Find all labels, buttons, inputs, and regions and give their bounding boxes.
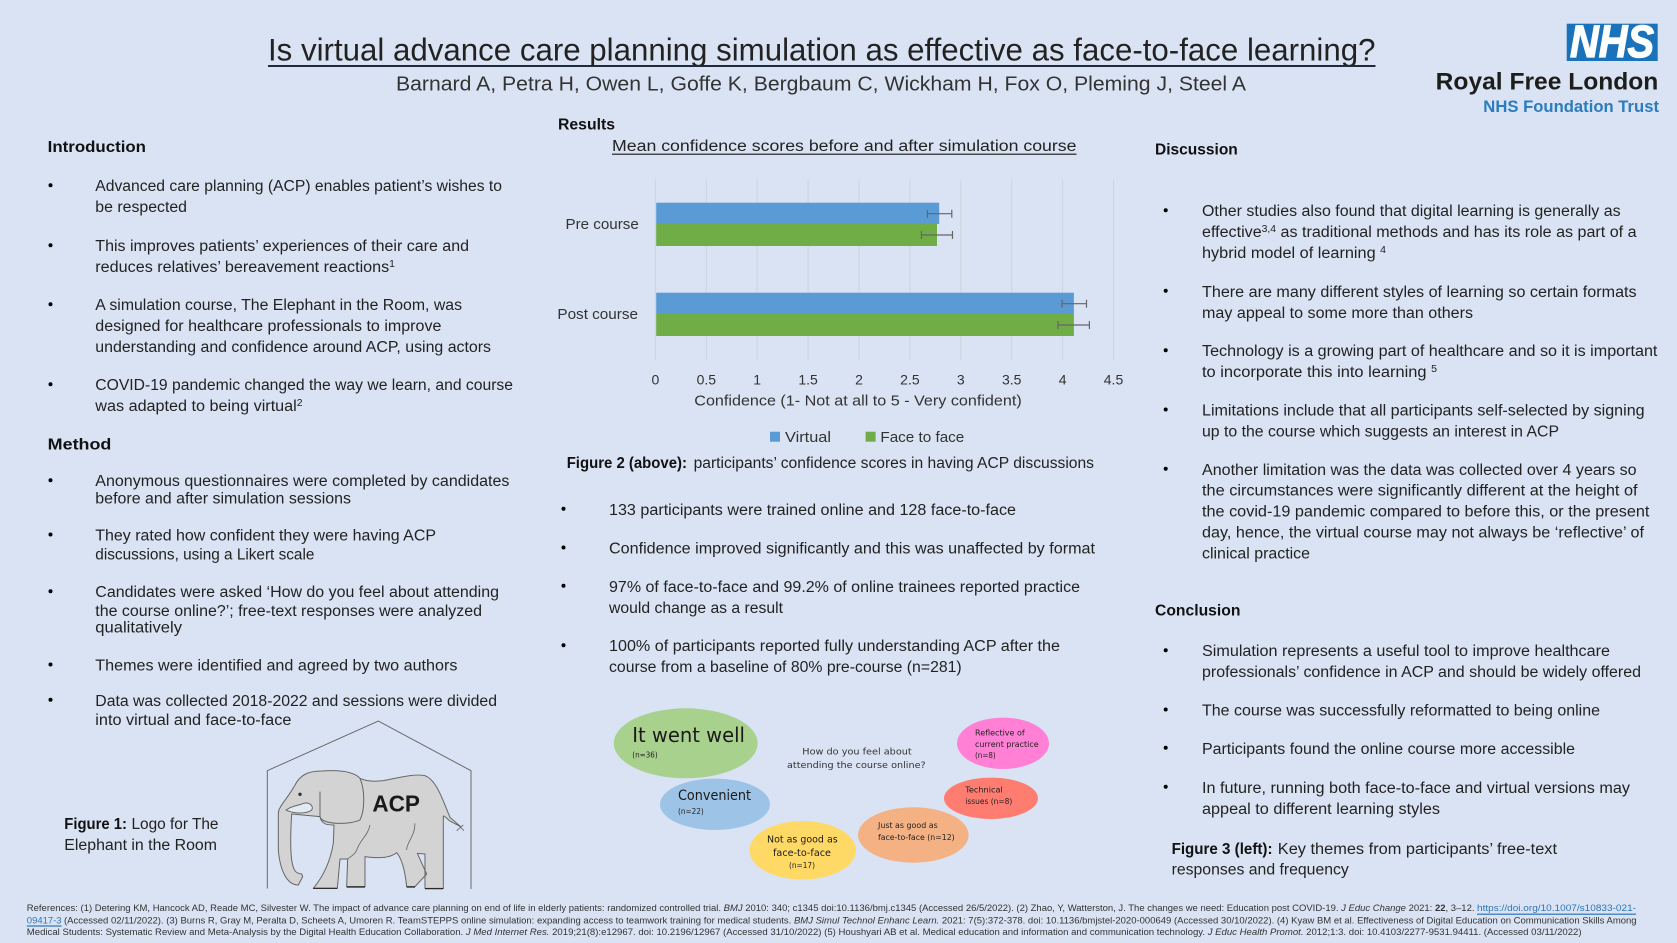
bullet: likert scale: They rated how confident they were having ACP [95, 528, 436, 544]
bullet: covid-19: COVID-19 pandemic changed the way we learn, and course [95, 377, 513, 394]
panel: introduction [48, 139, 513, 415]
figure 2 caption: participants’ confidence scores in having ACP discussions [694, 455, 1094, 472]
heading: method: Method [48, 436, 111, 454]
theme: not as good as face-to-face: (n=17) [789, 861, 815, 870]
logo: Royal Free London NHS: Royal Free London [1436, 68, 1658, 96]
bullet: advance care planning: be respected [95, 199, 187, 216]
bullet: advance care planning [48, 178, 502, 216]
bullet: questionnaires: before and after simulation sessions [95, 490, 351, 508]
bullet: another limitation: clinical practice [1202, 546, 1310, 562]
bullet: experiences of care: 1 [389, 259, 395, 270]
bullet: covid-19: was adapted to being virtual [95, 398, 288, 415]
bullet: another limitation: the covid-19 pandemic compared to before this, or the present [1202, 504, 1650, 520]
heading: conclusion: Conclusion [1155, 602, 1240, 620]
references: https://doi.org/10.1007/s10833-021- [1477, 903, 1636, 913]
bullet: questionnaires [48, 473, 510, 508]
theme: just as good as face-to-face [858, 807, 969, 863]
category labels: Post course [557, 306, 638, 323]
theme: convenient: Convenient [678, 788, 751, 804]
panel: results [557, 116, 1123, 676]
bullet: technology: Technology is a growing part of healthcare and so it is important [1202, 343, 1658, 360]
category labels [557, 216, 639, 323]
bullet: future [1164, 780, 1630, 818]
central question: attending the course online? [787, 761, 926, 771]
bullet: technology: to incorporate this into learning [1202, 364, 1414, 381]
bullet: simulation course: designed for healthcare professionals to improve [95, 318, 441, 335]
bullet: limitations: Limitations include that all participants self-selected by signing [1202, 402, 1645, 420]
bullet: covid-19: 2 [297, 398, 303, 409]
bullet: covid-19 [48, 377, 513, 415]
panel: method [48, 436, 510, 729]
theme: it went well [614, 708, 758, 778]
axis tick labels [652, 372, 1123, 388]
elephant body [278, 771, 461, 888]
bullet: other studies: effective [1202, 224, 1259, 241]
bullet: data collection: into virtual and face-to-face [95, 712, 291, 729]
bullet: technology: 5 [1431, 364, 1437, 375]
figure 1 caption: Elephant in the Room [64, 837, 217, 854]
figure 1 caption [64, 816, 218, 854]
figure 1 caption: Logo for The [132, 816, 218, 833]
references: (Accessed 02/11/2022). (3) Burns R, Gray M, Peralta D, Scheets A, Umoren R. TeamSTEPPS online simulation: expanding access to teamwork training for medical students. BMJ Simul Technol Enhanc Learn. 2021: 7(5):372-378. doi: 10.1136/bmjstel-2020-000649 (Accessed 30/10/2022). (4) Kyaw BM et al. Effectiveness of Digital Education on Communication Skills Among [64, 916, 1637, 926]
bullet: other studies: hybrid model of learning [1202, 245, 1367, 262]
bullet: learning styles [1164, 284, 1637, 322]
theme: just as good as face-to-face: face-to-face (n=12) [878, 833, 955, 842]
central question: How do you feel about [802, 748, 912, 758]
figure 3 caption: responses and frequency [1172, 862, 1349, 878]
bullet: other studies: 4 [1380, 245, 1386, 256]
authors: Barnard A, Petra H, Owen L, Goffe K, Bergbaum C, Wickham H, Fox O, Pleming J, Steel A [396, 72, 1246, 96]
bullet: another limitation: the circumstances were significantly different at the height of [1202, 482, 1638, 500]
bullet: learning styles: There are many different styles of learning so certain formats [1202, 284, 1637, 301]
bullet: experiences of care: reduces relatives’ bereavement reactions [95, 259, 377, 276]
theme: reflective of current practice: current practice [975, 740, 1039, 749]
legend: Face to face [880, 429, 964, 446]
axis tick labels: 3 [957, 372, 965, 388]
bullet: another limitation: day, hence, the virtual course may not always be ‘reflective’ of [1202, 524, 1645, 542]
bullet: experiences of care: This improves patients’ experiences of their care and [95, 238, 469, 255]
bullet: free-text question: the course online?’; free-text responses were analyzed [95, 603, 482, 620]
axis tick labels: 1.5 [798, 372, 818, 388]
panel: discussion [1155, 142, 1658, 562]
legend: Virtual [785, 429, 831, 446]
bullet: free-text question: Candidates were asked ‘How do you feel about attending [95, 584, 499, 601]
bullet: understanding ACP: 100% of participants reported fully understanding ACP after the [609, 638, 1060, 655]
bullet: simulation course [48, 297, 491, 356]
bars: pre course [656, 203, 939, 246]
bullet: advance care planning: Advanced care planning (ACP) enables patient’s wishes to [95, 178, 502, 195]
theme: it went well: It went well [632, 723, 745, 747]
bullet: future: In future, running both face-to-face and virtual versions may [1202, 780, 1630, 797]
bullet: accessible: Participants found the online course more accessible [1202, 741, 1575, 758]
bullet: practice change [562, 579, 1080, 617]
heading: results: Results [558, 116, 615, 134]
logo: Royal Free London NHS: NHS Foundation Trust [1483, 98, 1660, 116]
axis tick labels: 2 [855, 372, 863, 388]
axis tick labels: 0 [652, 372, 660, 388]
bullet: participants trained: 133 participants were trained online and 128 face-to-face [609, 502, 1016, 519]
bullet: other studies: Other studies also found that digital learning is generally as [1202, 203, 1621, 220]
theme: reflective of current practice [957, 718, 1049, 769]
bullet: reformatted online: The course was successfully reformatted to being online [1202, 702, 1600, 720]
logo: Royal Free London NHS [1436, 16, 1660, 116]
chart title: Mean confidence scores before and after simulation course [612, 138, 1076, 155]
references: 09417-3 [27, 916, 62, 926]
bullet: likert scale: discussions, using a Likert scale [95, 546, 314, 564]
axis tick labels: 1 [753, 372, 761, 388]
bullet: technology [1164, 343, 1658, 381]
axis tick labels: 3.5 [1002, 372, 1022, 388]
icon: elephant in the room logo [267, 721, 471, 889]
legend [770, 429, 964, 446]
category labels: Pre course [566, 216, 639, 233]
figure 2 caption: Figure 2 (above): [567, 455, 687, 472]
bullet: other studies [1164, 203, 1637, 262]
axis tick labels: 2.5 [900, 372, 920, 388]
bullet: confidence improved: Confidence improved significantly and this was unaffected by format [609, 540, 1096, 558]
panel: conclusion [1155, 602, 1641, 818]
bars: post course [656, 293, 1074, 336]
bullet: other studies: 3,4 [1262, 224, 1277, 235]
bullet: simulation useful: Simulation represents a useful tool to improve healthcare [1202, 643, 1610, 660]
figure 3 caption: Key themes from participants’ free-text [1278, 841, 1558, 858]
error bars [921, 210, 1089, 329]
bullet: questionnaires: Anonymous questionnaires were completed by candidates [95, 473, 510, 490]
figure 1 caption: Figure 1: [64, 816, 127, 833]
bullet: practice change: 97% of face-to-face and 99.2% of online trainees reported practice [609, 579, 1080, 596]
logo: Royal Free London NHS: NHS [1570, 16, 1654, 67]
axis tick labels: 0.5 [697, 372, 716, 388]
bullet: simulation useful [1164, 643, 1641, 681]
theme: not as good as face-to-face: face-to-face [773, 848, 831, 859]
bullet: experiences of care [48, 238, 469, 276]
bullet: free-text question [48, 584, 499, 636]
theme: not as good as face-to-face: Not as good as [767, 834, 838, 846]
theme: technical issues: issues (n=8) [965, 797, 1012, 806]
title: Is virtual advance care planning simulation as effective as face-to-face learning? [268, 32, 1376, 68]
bullet: likert scale [48, 528, 436, 564]
bullet: practice change: would change as a result [608, 600, 784, 617]
references [27, 903, 1637, 937]
bullet: understanding ACP: course from a baseline of 80% pre-course (n=281) [609, 659, 962, 676]
bar chart: mean confidence [557, 179, 1123, 446]
figure 3: key themes bubble diagram [614, 708, 1049, 880]
bullet: simulation course: A simulation course, The Elephant in the Room, was [95, 297, 462, 314]
theme: it went well: (n=36) [632, 750, 658, 760]
theme: not as good as face-to-face [749, 821, 856, 880]
axis tick labels: 4.5 [1104, 372, 1123, 388]
axis tick labels: 4 [1059, 372, 1067, 388]
theme: reflective of current practice: (n=8) [975, 751, 996, 760]
theme: reflective of current practice: Reflective of [975, 728, 1025, 738]
figure 3 caption: Figure 3 (left): [1172, 841, 1272, 858]
axis title: Confidence (1- Not at all to 5 - Very confident) [694, 392, 1022, 410]
theme: just as good as face-to-face: Just as good as [877, 821, 938, 830]
bullet: simulation useful: professionals’ confidence in ACP and should be widely offered [1202, 664, 1641, 681]
theme: technical issues [944, 778, 1038, 819]
bullet: understanding ACP [562, 638, 1060, 676]
heading: introduction: Introduction [48, 139, 146, 156]
central question [787, 748, 926, 771]
icon: elephant in the room logo: ACP [372, 790, 420, 816]
theme: convenient: (n=22) [678, 807, 704, 816]
bullet: future: appeal to different learning styles [1202, 801, 1440, 818]
theme: technical issues: Technical [964, 786, 1003, 794]
bullet: learning styles: may appeal to some more than others [1202, 305, 1473, 322]
bullet: free-text question: qualitatively [95, 620, 182, 636]
bullet: data collection [48, 693, 497, 729]
bullet: limitations: up to the course which suggests an interest in ACP [1202, 424, 1559, 440]
bullet: other studies: as traditional methods and has its role as part of a [1276, 224, 1637, 241]
bullet: limitations [1164, 402, 1645, 440]
references: Medical Students: Systematic Review and Meta-Analysis by the Digital Health Education Collaboration. J Med Internet Res. 2019;21(8):e12967. doi: 10.2196/12967 (Accessed 31/10/2022) (5) Houshyari AB et al. Medical education and information and communication technology. J Educ Health Promot. 2012;1:3. doi: 10.4103/2277-9531.94411. (Accessed 03/11/2022) [27, 927, 1582, 937]
heading: discussion: Discussion [1155, 142, 1238, 158]
bullet: themes: Themes were identified and agreed by two authors [95, 658, 458, 674]
bullet: another limitation: Another limitation was the data was collected over 4 years so [1202, 462, 1637, 479]
references: References: (1) Detering KM, Hancock AD, Reade MC, Silvester W. The impact of advance care planning on end of life in elderly patients: randomized controlled trial. BMJ 2010: 340; c1345 doi:10.1136/bmj.c1345 (Accessed 26/5/2022). (2) Zhao, Y, Watterston, J. The changes we need: Education post COVID-19. J Educ Change 2021: 22, 3–12. [27, 903, 1474, 913]
bullet: another limitation [1164, 462, 1650, 562]
figure 3 caption [1172, 841, 1558, 878]
theme: convenient [660, 779, 770, 830]
bullet: data collection: Data was collected 2018-2022 and sessions were divided [95, 693, 497, 710]
bullet: simulation course: understanding and confidence around ACP, using actors [95, 339, 491, 356]
